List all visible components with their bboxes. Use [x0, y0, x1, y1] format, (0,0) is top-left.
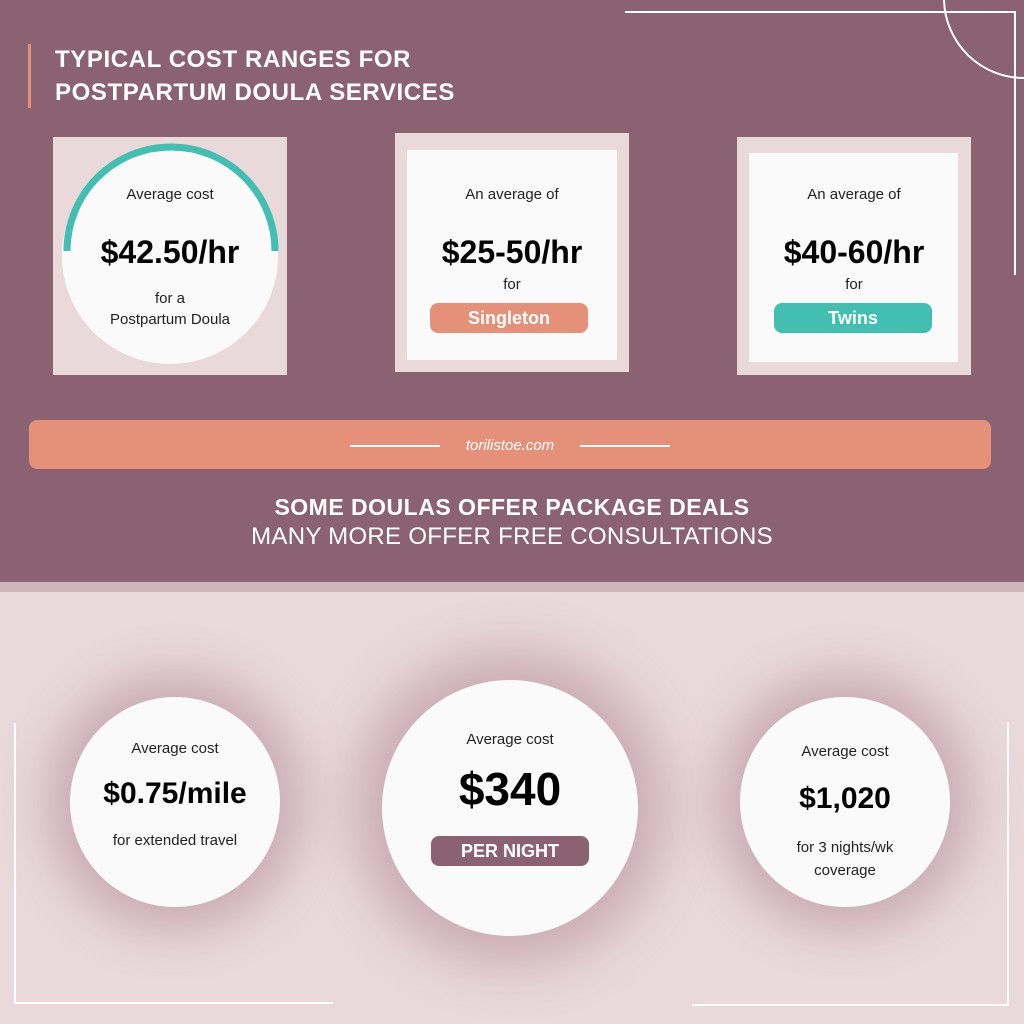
circle: per night: Average cost	[466, 731, 554, 748]
banner: torilistoe.com	[466, 437, 554, 454]
circle: mileage	[70, 697, 280, 907]
corner lines bottom	[14, 722, 1009, 1006]
panel: average cost: Postpartum Doula	[110, 311, 230, 328]
circle: per night: $340	[459, 763, 561, 815]
subheading	[251, 494, 773, 550]
circle: mileage: for extended travel	[113, 832, 237, 849]
title: TYPICAL COST RANGES FOR	[55, 46, 411, 73]
decorative corner lines top right	[625, 0, 1024, 275]
panel: average cost: for a	[155, 290, 185, 307]
circle: mileage: Average cost	[131, 740, 219, 757]
pill: per night: PER NIGHT	[461, 841, 559, 861]
title	[28, 44, 471, 108]
panel: singleton: An average of	[465, 186, 559, 203]
pill: twins: Twins	[828, 308, 878, 328]
panel: singleton: for	[503, 276, 521, 293]
panel: average cost: $42.50/hr	[101, 234, 239, 270]
panel: twins: for	[845, 276, 863, 293]
panel: twins: $40-60/hr	[784, 234, 924, 270]
subheading: MANY MORE OFFER FREE CONSULTATIONS	[251, 523, 773, 550]
panel: singleton	[395, 133, 629, 372]
panel: singleton: $25-50/hr	[442, 234, 582, 270]
circle: per night	[382, 680, 638, 936]
panel: average cost	[53, 137, 287, 375]
pill: per night	[431, 836, 589, 866]
pill: singleton	[430, 303, 588, 333]
circle: 3 nights: Average cost	[801, 743, 889, 760]
circle: 3 nights: $1,020	[799, 782, 891, 815]
circle: 3 nights: coverage	[814, 862, 876, 879]
subheading: SOME DOULAS OFFER PACKAGE DEALS	[274, 494, 750, 520]
circle with arc	[62, 144, 278, 364]
title: POSTPARTUM DOULA SERVICES	[55, 79, 455, 106]
panel: twins: An average of	[807, 186, 901, 203]
panel: twins	[737, 137, 971, 375]
pill: twins	[774, 303, 932, 333]
circle: mileage: $0.75/mile	[103, 777, 247, 810]
panel: average cost: Average cost	[126, 186, 214, 203]
circle: 3 nights	[740, 697, 950, 907]
banner	[29, 420, 991, 469]
circle: 3 nights: for 3 nights/wk	[797, 839, 893, 856]
pill: singleton: Singleton	[468, 308, 550, 328]
